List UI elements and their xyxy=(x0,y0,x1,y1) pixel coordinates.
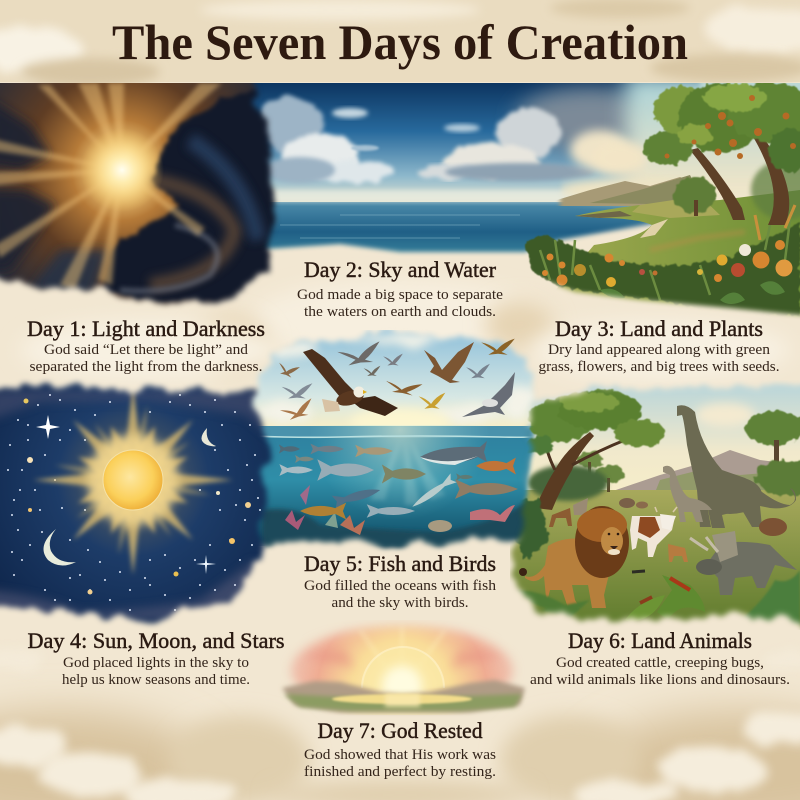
seabed and reef xyxy=(262,500,530,550)
warthog xyxy=(759,518,787,536)
caption: Day 4: help us know seasons and time. xyxy=(62,672,250,688)
acacia tree xyxy=(526,390,665,510)
caption: Day 1: Day 1: Light and Darkness xyxy=(27,316,265,341)
caption: Day 5 xyxy=(304,551,497,611)
hills xyxy=(616,450,772,490)
dark cloud left xyxy=(0,100,55,270)
sea tint left xyxy=(520,424,536,500)
leaves and bugs xyxy=(512,500,800,625)
moon small xyxy=(202,428,216,446)
caption: Day 4 xyxy=(28,628,284,688)
bright stars xyxy=(24,398,251,594)
sun xyxy=(362,647,444,688)
orange trees xyxy=(644,82,800,225)
caption: Day 5: and the sky with birds. xyxy=(332,595,468,611)
cloud bank right xyxy=(418,109,630,181)
grey eagle xyxy=(462,372,515,417)
caption: Day 2: God made a big space to separate xyxy=(297,287,503,303)
caption: Day 6: and wild animals like lions and dinosaurs. xyxy=(530,672,790,688)
caption: Day 2: Day 2: Sky and Water xyxy=(304,257,497,282)
dark swirl xyxy=(100,90,280,304)
small dinosaur xyxy=(663,466,712,522)
caption: Day 7: finished and perfect by resting. xyxy=(304,764,496,780)
triceratops xyxy=(690,531,797,595)
distant hills xyxy=(557,177,682,206)
panel: Day 7 God rested xyxy=(280,620,525,715)
distant herd xyxy=(549,498,648,527)
caption: Day 5: God filled the oceans with fish xyxy=(304,578,497,594)
caption: Day 7: God showed that His work was xyxy=(304,747,496,763)
hawk xyxy=(424,342,474,383)
cow xyxy=(630,507,677,557)
star dust xyxy=(8,395,260,610)
caption: Day 3: grass, flowers, and big trees with seeds. xyxy=(538,359,780,375)
caption: Day 6 xyxy=(530,628,790,688)
birds flying xyxy=(276,339,515,422)
big dinosaur xyxy=(677,405,796,528)
panel: Day 2 sky and water xyxy=(248,83,702,256)
panel: Day 1 light and darkness xyxy=(0,75,290,315)
panel: Day 6 land animals xyxy=(505,380,800,630)
top clouds behind title xyxy=(0,0,800,86)
cloud bank left xyxy=(258,97,394,183)
caption: Day 4: Day 4: Sun, Moon, and Stars xyxy=(28,628,284,653)
caption: Day 3 xyxy=(538,316,780,375)
caption: Day 2: the waters on earth and clouds. xyxy=(304,304,496,320)
caption: Day 7: Day 7: God Rested xyxy=(318,718,482,743)
lion xyxy=(519,506,629,608)
caption: Day 3: Day 3: Land and Plants xyxy=(555,316,763,341)
distant trees xyxy=(528,411,800,501)
panel: Day 4 sun, moon and stars xyxy=(0,375,285,630)
sun rays xyxy=(33,385,233,575)
caption: Day 2 xyxy=(297,257,503,320)
eagle xyxy=(303,349,398,416)
cub xyxy=(668,544,688,562)
caption: Day 6: God created cattle, creeping bugs, xyxy=(556,655,764,671)
caption: Day 4: God placed lights in the sky to xyxy=(63,655,249,671)
caption: Day 1 xyxy=(27,316,265,375)
bottom clouds xyxy=(0,648,800,800)
caption: Day 7 xyxy=(304,718,496,780)
caption: Day 5: Day 5: Fish and Birds xyxy=(304,551,496,576)
caption: Day 1: God said “Let there be light” and xyxy=(44,342,249,358)
caption: Day 1: separated the light from the darkness. xyxy=(30,359,262,375)
flowers foreground xyxy=(525,205,800,315)
fishes xyxy=(279,441,518,520)
panel: Day 3 land and plants xyxy=(525,75,800,320)
shore and meadow xyxy=(557,190,800,318)
small birds xyxy=(337,341,382,367)
caption: Day 6: Day 6: Land Animals xyxy=(568,628,752,653)
caption: Day 3: Dry land appeared along with green xyxy=(548,342,771,358)
hills xyxy=(282,680,525,712)
moon large xyxy=(44,529,76,566)
panel: Day 5 fish and birds xyxy=(252,330,538,552)
light rays xyxy=(0,83,222,290)
title: The Seven Days of Creation xyxy=(112,14,688,70)
grey storm cloud xyxy=(515,88,665,152)
